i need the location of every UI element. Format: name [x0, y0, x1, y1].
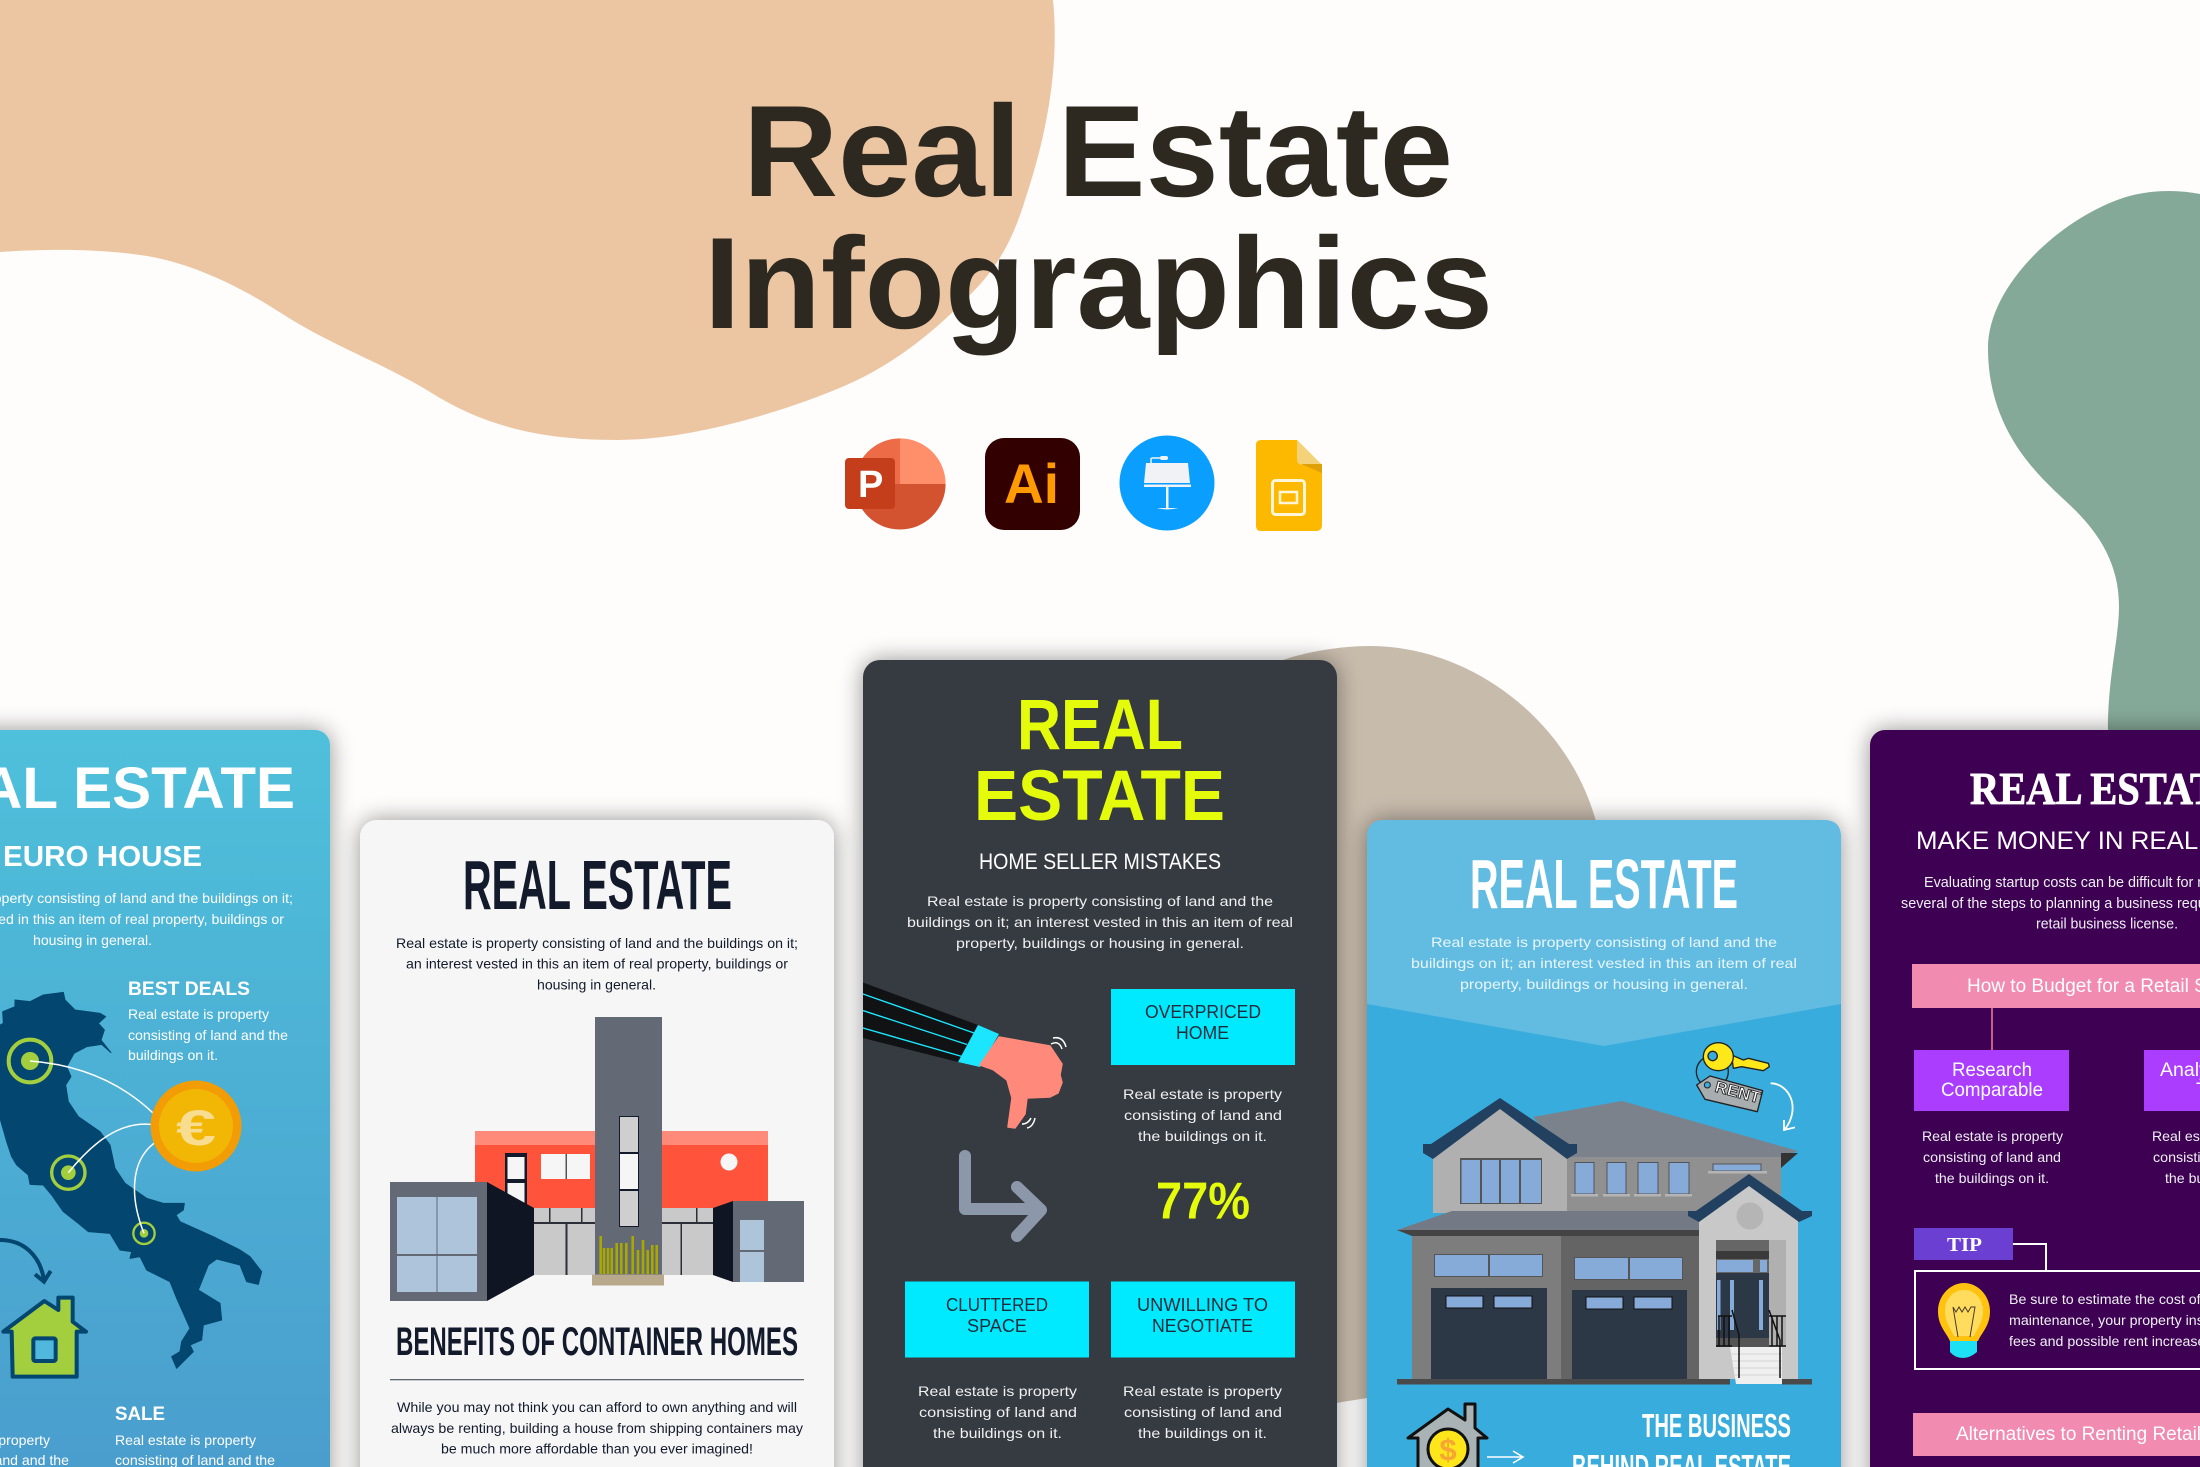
intro text: Real estate is property consisting of land and the buildings on it; — [396, 935, 798, 951]
tip text: Be sure to estimate the cost of — [2009, 1292, 2200, 1308]
banner: alternatives: Alternatives to Renting Retail — [1956, 1424, 2200, 1445]
text block: overpriced: Real estate is property — [1123, 1086, 1282, 1102]
container home illustration — [390, 1017, 804, 1301]
background blob: green — [1988, 191, 2200, 735]
icon: Illustrator: Ai — [1004, 452, 1059, 515]
header chevron — [1367, 820, 1841, 1046]
text block: cluttered: Real estate is property — [918, 1383, 1077, 1399]
text block: best deals: consisting of land and the — [128, 1027, 288, 1043]
callout: overpriced home: HOME — [1176, 1023, 1229, 1043]
statistic: 77%: 77% — [1156, 1172, 1250, 1230]
body text: be much more affordable than you ever imagined! — [441, 1440, 753, 1456]
icon: house with dollar coin: $ — [1439, 1432, 1457, 1467]
text block: sale — [115, 1404, 275, 1467]
tip label: TIP — [1947, 1234, 1982, 1256]
icon: rent key tag — [1696, 1043, 1769, 1112]
map of Italy with markers, links, coin, arrow and house — [0, 992, 262, 1377]
text block: best deals: buildings on it. — [128, 1047, 218, 1063]
house illustration — [1397, 1098, 1812, 1384]
text block: best deals: BEST DEALS — [128, 979, 250, 1000]
heading — [974, 686, 1225, 836]
body text: While you may not think you can afford to own anything and will — [397, 1399, 797, 1415]
banner: budget — [1912, 964, 2200, 1008]
heading: REAL — [1017, 686, 1183, 765]
intro text — [1411, 934, 1797, 992]
icon: euro coin — [150, 1080, 242, 1172]
map outline — [0, 992, 262, 1368]
body text: always be renting, building a house from shipping containers may — [391, 1420, 803, 1436]
subheading: EURO HOUSE — [3, 841, 202, 873]
callout: cluttered space — [905, 1282, 1089, 1358]
icon: light bulb — [1938, 1283, 1990, 1358]
arrow — [965, 1156, 1041, 1236]
icon: thumbs down hand — [863, 982, 1066, 1128]
arrow — [1487, 1451, 1523, 1463]
text block: overpriced: consisting of land and — [1124, 1107, 1282, 1123]
section heading: THE BUSINESS — [1642, 1407, 1791, 1444]
banner: alternatives — [1913, 1413, 2200, 1456]
title: Infographics — [704, 210, 1493, 356]
step box: research comparable: Research — [1952, 1059, 2032, 1081]
intro text: buildings on it; an interest vested in this an item of real — [1411, 955, 1797, 971]
text block: negotiate: the buildings on it. — [1138, 1425, 1267, 1441]
panel: euro house card — [0, 730, 330, 1467]
tip text — [2009, 1292, 2200, 1350]
intro text — [396, 935, 798, 992]
heading: REAL ESTATE — [1470, 845, 1738, 923]
text block: negotiate: Real estate is property — [1123, 1383, 1282, 1399]
text block: sale: SALE — [115, 1404, 165, 1425]
text block: sale: Real estate is property — [115, 1432, 256, 1448]
text block: research — [1922, 1128, 2063, 1186]
step box: research comparable: Comparable — [1941, 1079, 2043, 1101]
icon: green house — [3, 1298, 86, 1377]
text block: best deals: Real estate is property — [128, 1006, 269, 1022]
arrow — [0, 1240, 51, 1282]
intro text: property, buildings or housing in general. — [956, 935, 1244, 951]
text block: analyze — [2152, 1128, 2200, 1186]
panel: container homes card — [360, 820, 834, 1467]
text block: research: the buildings on it. — [1935, 1170, 2049, 1186]
callout: unwilling to negotiate: NEGOTIATE — [1152, 1316, 1253, 1336]
location markers — [9, 1040, 155, 1244]
step box: analyze — [2144, 1050, 2200, 1111]
title: Real Estate — [743, 78, 1453, 224]
callout: overpriced home — [1111, 989, 1295, 1065]
panel: make money card — [1870, 730, 2200, 1467]
text block: overpriced: the buildings on it. — [1138, 1128, 1267, 1144]
step box: research comparable — [1914, 1050, 2069, 1111]
icon: Illustrator — [985, 438, 1080, 530]
text block: research: Real estate is property — [1922, 1128, 2063, 1144]
heading: REAL ESTATE — [463, 846, 732, 924]
text block: cluttered — [918, 1383, 1077, 1441]
intro text: Real estate is property consisting of land and the — [927, 893, 1273, 909]
callout: cluttered space: CLUTTERED — [946, 1295, 1048, 1315]
panel: home seller mistakes card — [863, 660, 1337, 1467]
icon: Keynote — [1120, 436, 1214, 530]
intro text: property, buildings or housing in general. — [1460, 976, 1748, 992]
intro text: an interest vested in this an item of real property, buildings or — [406, 956, 788, 972]
heading: ESTATE — [974, 757, 1225, 836]
text block: negotiate — [1123, 1383, 1282, 1441]
intro text: housing in general. — [537, 976, 656, 992]
background blob: taupe — [1270, 646, 1597, 1410]
text block: best deals — [128, 979, 288, 1063]
callout: cluttered space: SPACE — [967, 1316, 1027, 1336]
icon: euro coin: € — [176, 1100, 216, 1156]
text block: negotiate: consisting of land and — [1124, 1404, 1282, 1420]
section heading — [1572, 1407, 1791, 1467]
text block: cluttered: the buildings on it. — [933, 1425, 1062, 1441]
software icons row — [845, 436, 1322, 531]
intro text: retail business license. — [2036, 916, 2178, 932]
icon: PowerPoint — [845, 438, 946, 530]
text block: research: consisting of land and — [1923, 1149, 2061, 1165]
arrow — [1771, 1083, 1795, 1130]
callout: unwilling to negotiate — [1111, 1282, 1295, 1358]
title — [704, 78, 1493, 356]
callout: overpriced home: OVERPRICED — [1145, 1002, 1261, 1022]
text block: overpriced — [1123, 1086, 1282, 1144]
intro text — [0, 890, 293, 948]
intro text — [907, 893, 1293, 951]
tip label — [1914, 1228, 2013, 1260]
background blob: tan — [0, 0, 1055, 440]
intro text — [1901, 875, 2200, 932]
text block: lower left — [0, 1432, 69, 1467]
body text — [391, 1399, 803, 1456]
text block: cluttered: consisting of land and — [919, 1404, 1077, 1420]
icon: Google Slides — [1256, 440, 1322, 531]
section heading: BENEFITS OF CONTAINER HOMES — [396, 1320, 798, 1364]
intro text: buildings on it; an interest vested in this an item of real — [907, 914, 1293, 930]
subheading: HOME SELLER MISTAKES — [979, 849, 1221, 874]
panel: business behind real estate card — [1367, 820, 1841, 1467]
intro text: housing in general. — [33, 932, 152, 948]
icon: PowerPoint: P — [858, 464, 883, 506]
callout: unwilling to negotiate: UNWILLING TO — [1137, 1295, 1268, 1315]
icon: house with dollar coin — [1408, 1404, 1487, 1467]
intro text: Real estate is property consisting of land and the — [1431, 934, 1777, 950]
connector lines — [30, 1061, 154, 1233]
tip box — [1915, 1271, 2200, 1369]
icon: rent key tag: RENT — [1713, 1079, 1762, 1107]
